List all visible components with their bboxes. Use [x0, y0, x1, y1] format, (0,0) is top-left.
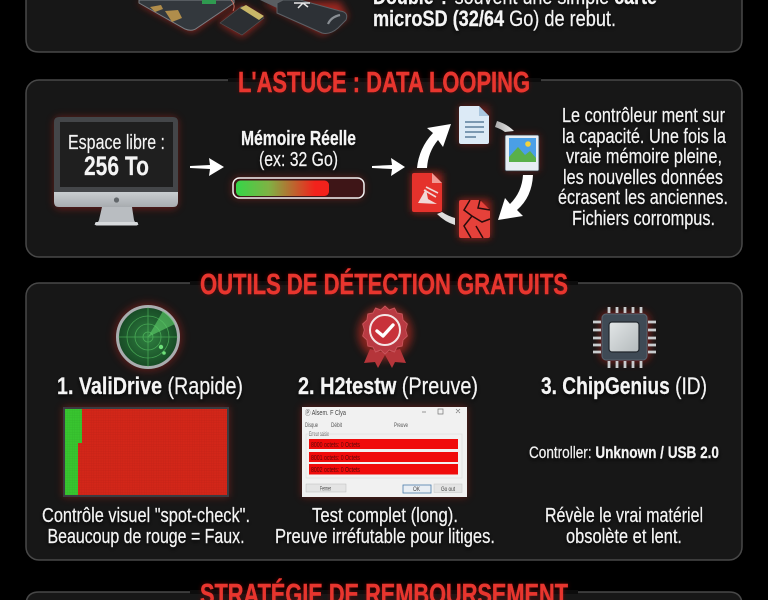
- text: controller explanation: écrasent les anciennes.: [558, 187, 728, 209]
- text: controller explanation: [558, 105, 728, 230]
- screenshot: H2testw window: [302, 407, 467, 497]
- icon: image: [505, 135, 539, 171]
- heading gap: [190, 590, 578, 594]
- text: controller explanation: Fichiers corrompus.: [572, 208, 715, 230]
- text: ChipGenius description: obsolète et lent.: [566, 526, 682, 548]
- screenshot: H2testw window: Disque: [305, 423, 318, 429]
- text: controller explanation: les nouvelles données: [563, 167, 723, 189]
- panel: data looping: [26, 67, 742, 257]
- text: free space value: 256 To: [84, 151, 149, 181]
- text: free space label: Espace libre :: [68, 132, 165, 154]
- title: ChipGenius: 3. ChipGenius (ID): [541, 373, 707, 400]
- text: controller explanation: vraie mémoire pleine,: [566, 146, 722, 168]
- arrow: memory to loop: [372, 158, 405, 176]
- column: ValiDrive: [42, 303, 250, 548]
- screenshot: H2testw window: Fermer: [320, 486, 331, 492]
- screenshot: H2testw window: Ⓟ Alsem. F Clya: [305, 409, 346, 417]
- text: real memory: [241, 128, 356, 171]
- text: ValiDrive description: [42, 505, 250, 548]
- screenshot: H2testw window: 8000 octets: 0 Octets: [311, 440, 360, 449]
- text: ValiDrive description: Beaucoup de rouge = Faux.: [48, 526, 244, 548]
- panel: detection tools: [26, 267, 742, 560]
- icon: chip: [593, 307, 656, 368]
- icon: monitor showing fake free space: [54, 117, 178, 226]
- text: rebut description: microSD (32/64 Go) de rebut.: [373, 6, 616, 31]
- icon: cracked file: [459, 200, 490, 238]
- heading: data looping: L'ASTUCE : DATA LOOPING: [238, 67, 530, 99]
- column: ChipGenius: [529, 307, 719, 548]
- chart: surface map: [63, 407, 229, 497]
- heading: detection tools: OUTILS DE DÉTECTION GRATUITS: [200, 267, 568, 301]
- title: ValiDrive: 1. ValiDrive (Rapide): [57, 373, 243, 400]
- panel: refund strategy: [26, 577, 742, 600]
- text: H2testw description: [275, 505, 495, 548]
- arrow: document to image: [495, 121, 514, 132]
- arrow: image to cracked file: [498, 175, 533, 220]
- screenshot: H2testw window: Débit: [331, 423, 342, 429]
- text: real memory: Mémoire Réelle: [241, 128, 356, 150]
- text: H2testw description: Test complet (long).: [312, 505, 458, 527]
- title: H2testw: 2. H2testw (Preuve): [298, 373, 478, 400]
- diagram: overwrite loop: [412, 106, 539, 238]
- arrow: cracked file to red file: [437, 212, 455, 225]
- text: controller explanation: Le contrôleur ment sur: [562, 105, 725, 127]
- screenshot: H2testw window: Go out: [441, 487, 455, 493]
- screenshot: H2testw window: 8002 octets: 0 Octets: [311, 465, 360, 474]
- arrow: monitor to memory: [190, 158, 224, 176]
- column: H2testw: [275, 306, 495, 548]
- text: ChipGenius description: [545, 505, 703, 548]
- heading gap: [228, 78, 541, 82]
- text: ChipGenius description: Révèle le vrai matériel: [545, 505, 703, 527]
- memory gauge: [232, 177, 364, 199]
- icon: document: [459, 106, 489, 144]
- screenshot: H2testw window: OK: [413, 487, 420, 493]
- text: real memory: (ex: 32 Go): [259, 149, 338, 171]
- icon: radar: [114, 303, 182, 371]
- text: controller readout: Controller: Unknown / USB 2.0: [529, 443, 719, 462]
- panel: origin of fake drives: [26, 0, 742, 52]
- screenshot: H2testw window: Erreur saisie: [309, 432, 329, 438]
- text: H2testw description: Preuve irréfutable pour litiges.: [275, 526, 495, 548]
- arrow: red file to document: [417, 124, 451, 168]
- icon: SSD, microSD and USB stick: [137, 0, 348, 37]
- screenshot: H2testw window: Preuve: [394, 423, 408, 429]
- heading gap: [190, 281, 578, 285]
- icon: corrupted file: [412, 173, 442, 212]
- screenshot: H2testw window: 8001 octets: 0 Octets: [311, 453, 360, 462]
- text: controller explanation: la capacité. Une fois la: [562, 126, 727, 148]
- text: ValiDrive description: Contrôle visuel "spot-check".: [42, 505, 250, 527]
- icon: rosette: [358, 306, 412, 368]
